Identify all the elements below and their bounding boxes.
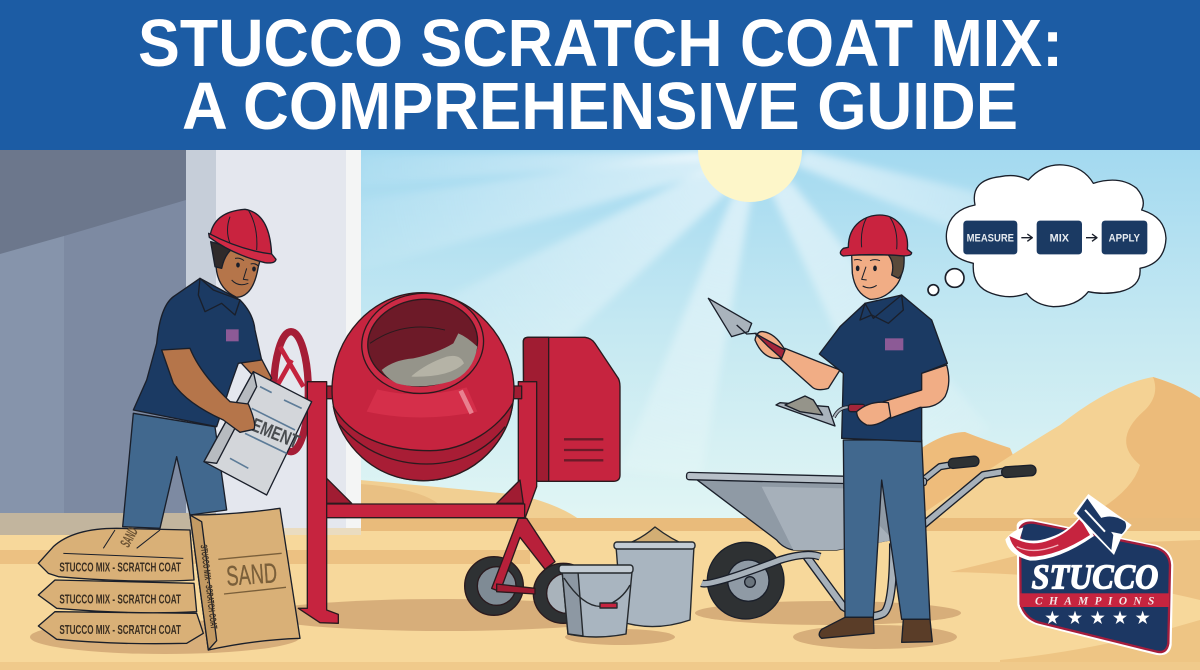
logo name: STUCCO (1032, 557, 1158, 596)
shoes (819, 617, 932, 642)
collar (198, 278, 240, 315)
sand dunes (360, 377, 1200, 530)
cement mixer (274, 287, 620, 623)
sand bag stack: STUCCO MIX - SCRATCH COAT (59, 561, 181, 575)
title banner (0, 0, 1200, 150)
buckets (559, 527, 695, 637)
thought bubble (928, 165, 1166, 307)
sand bag stack: SAND (118, 525, 142, 550)
hair (888, 255, 904, 278)
shirt logo (885, 338, 903, 350)
hair (211, 242, 233, 268)
pants (843, 440, 930, 619)
sand bag stack: STUCCO MIX - SCRATCH COAT (59, 623, 181, 637)
front bucket (559, 565, 633, 637)
motor housing (523, 337, 620, 481)
lower trowel (776, 396, 865, 426)
head (852, 255, 903, 299)
title text: STUCCO SCRATCH COAT MIX: (138, 6, 1063, 81)
mixer frame (298, 382, 555, 623)
ground (0, 518, 1200, 670)
mixer drum (332, 287, 514, 481)
shirt (819, 295, 947, 442)
trowel (1073, 494, 1132, 555)
wheelbarrow (686, 456, 1036, 619)
standing sand bag (190, 508, 300, 650)
badge (1017, 519, 1173, 655)
hard hat (840, 215, 912, 256)
title text (138, 6, 1063, 144)
swoosh (1005, 514, 1094, 561)
wheels (465, 557, 593, 623)
logo subtitle: CHAMPIONS (1035, 596, 1154, 608)
logo: Stucco Champions (1005, 494, 1173, 655)
sky background (0, 150, 1200, 540)
standing sand bag: SAND (225, 557, 278, 592)
red band (1020, 593, 1169, 607)
worker with trowels and wheelbarrow (686, 165, 1166, 642)
sand bag stack: STUCCO MIX - SCRATCH COAT (59, 592, 181, 606)
lower hand (857, 402, 891, 425)
hand wheel (274, 332, 308, 452)
process box: measure (963, 221, 1017, 254)
cement bag (204, 372, 312, 495)
face (232, 258, 258, 285)
sun rays (360, 150, 1130, 480)
title text: A COMPREHENSIVE GUIDE (182, 69, 1018, 144)
left arm (780, 348, 840, 390)
process box: mix: MIX (1050, 233, 1070, 245)
face (854, 259, 880, 288)
upper hand (755, 332, 785, 358)
head (213, 243, 261, 297)
far arm (240, 359, 272, 387)
rating stars (1045, 611, 1150, 624)
sand bag stack (38, 525, 203, 644)
right arm (883, 365, 949, 418)
shirt (133, 278, 262, 427)
building wall (0, 150, 361, 535)
cement bag: CEMENT (239, 411, 302, 453)
collar (860, 295, 903, 323)
process box: measure: MEASURE (967, 233, 1014, 245)
process box: mix (1037, 221, 1082, 254)
near arm (162, 348, 255, 432)
upper trowel (708, 298, 757, 337)
shirt logo (226, 329, 239, 341)
pants (123, 413, 227, 528)
process box: apply: APPLY (1109, 233, 1140, 245)
process box: apply (1102, 221, 1147, 254)
sun (698, 150, 802, 202)
worker pouring cement (38, 209, 312, 650)
ground shadows (30, 599, 961, 654)
back bucket (614, 527, 695, 627)
hard hat (209, 209, 276, 263)
arrow (1086, 234, 1097, 241)
arrow (1021, 234, 1032, 241)
